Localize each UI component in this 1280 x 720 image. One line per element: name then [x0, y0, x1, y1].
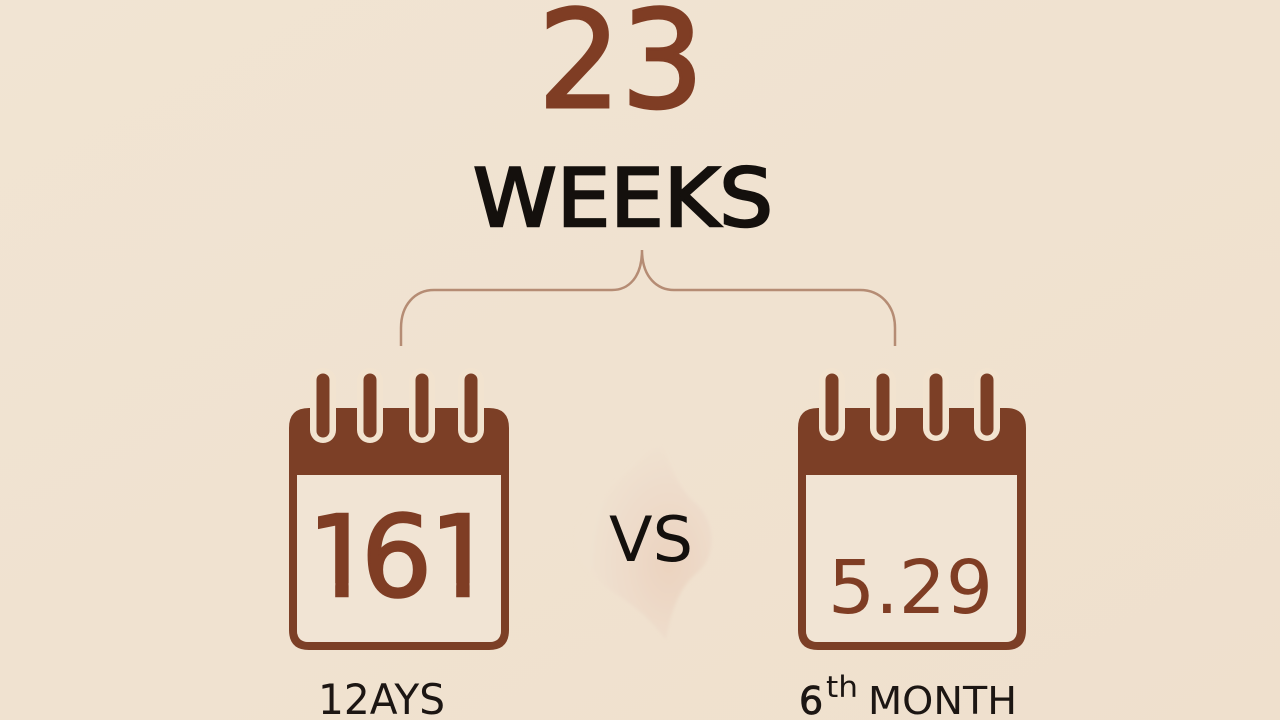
calendar rings — [323, 380, 471, 431]
vs label: VS — [609, 503, 693, 576]
calendar: 5.29 months — [798, 380, 1026, 650]
vs droplet backdrop — [577, 437, 712, 640]
calendar page — [806, 475, 1017, 642]
calendar: 161 days — [289, 380, 509, 650]
calendar page — [297, 475, 501, 642]
label: 6th MONTH: th — [826, 670, 858, 704]
calendar rings — [832, 380, 987, 429]
calendar number: 161 — [304, 493, 497, 623]
calendar number: 5.29 — [828, 545, 993, 631]
calendar body — [289, 408, 509, 650]
calendar body — [798, 408, 1026, 650]
bracket connector — [401, 250, 895, 346]
heading: WEEKS: WEEKS — [473, 152, 773, 245]
label: 6th MONTH — [799, 670, 1017, 720]
